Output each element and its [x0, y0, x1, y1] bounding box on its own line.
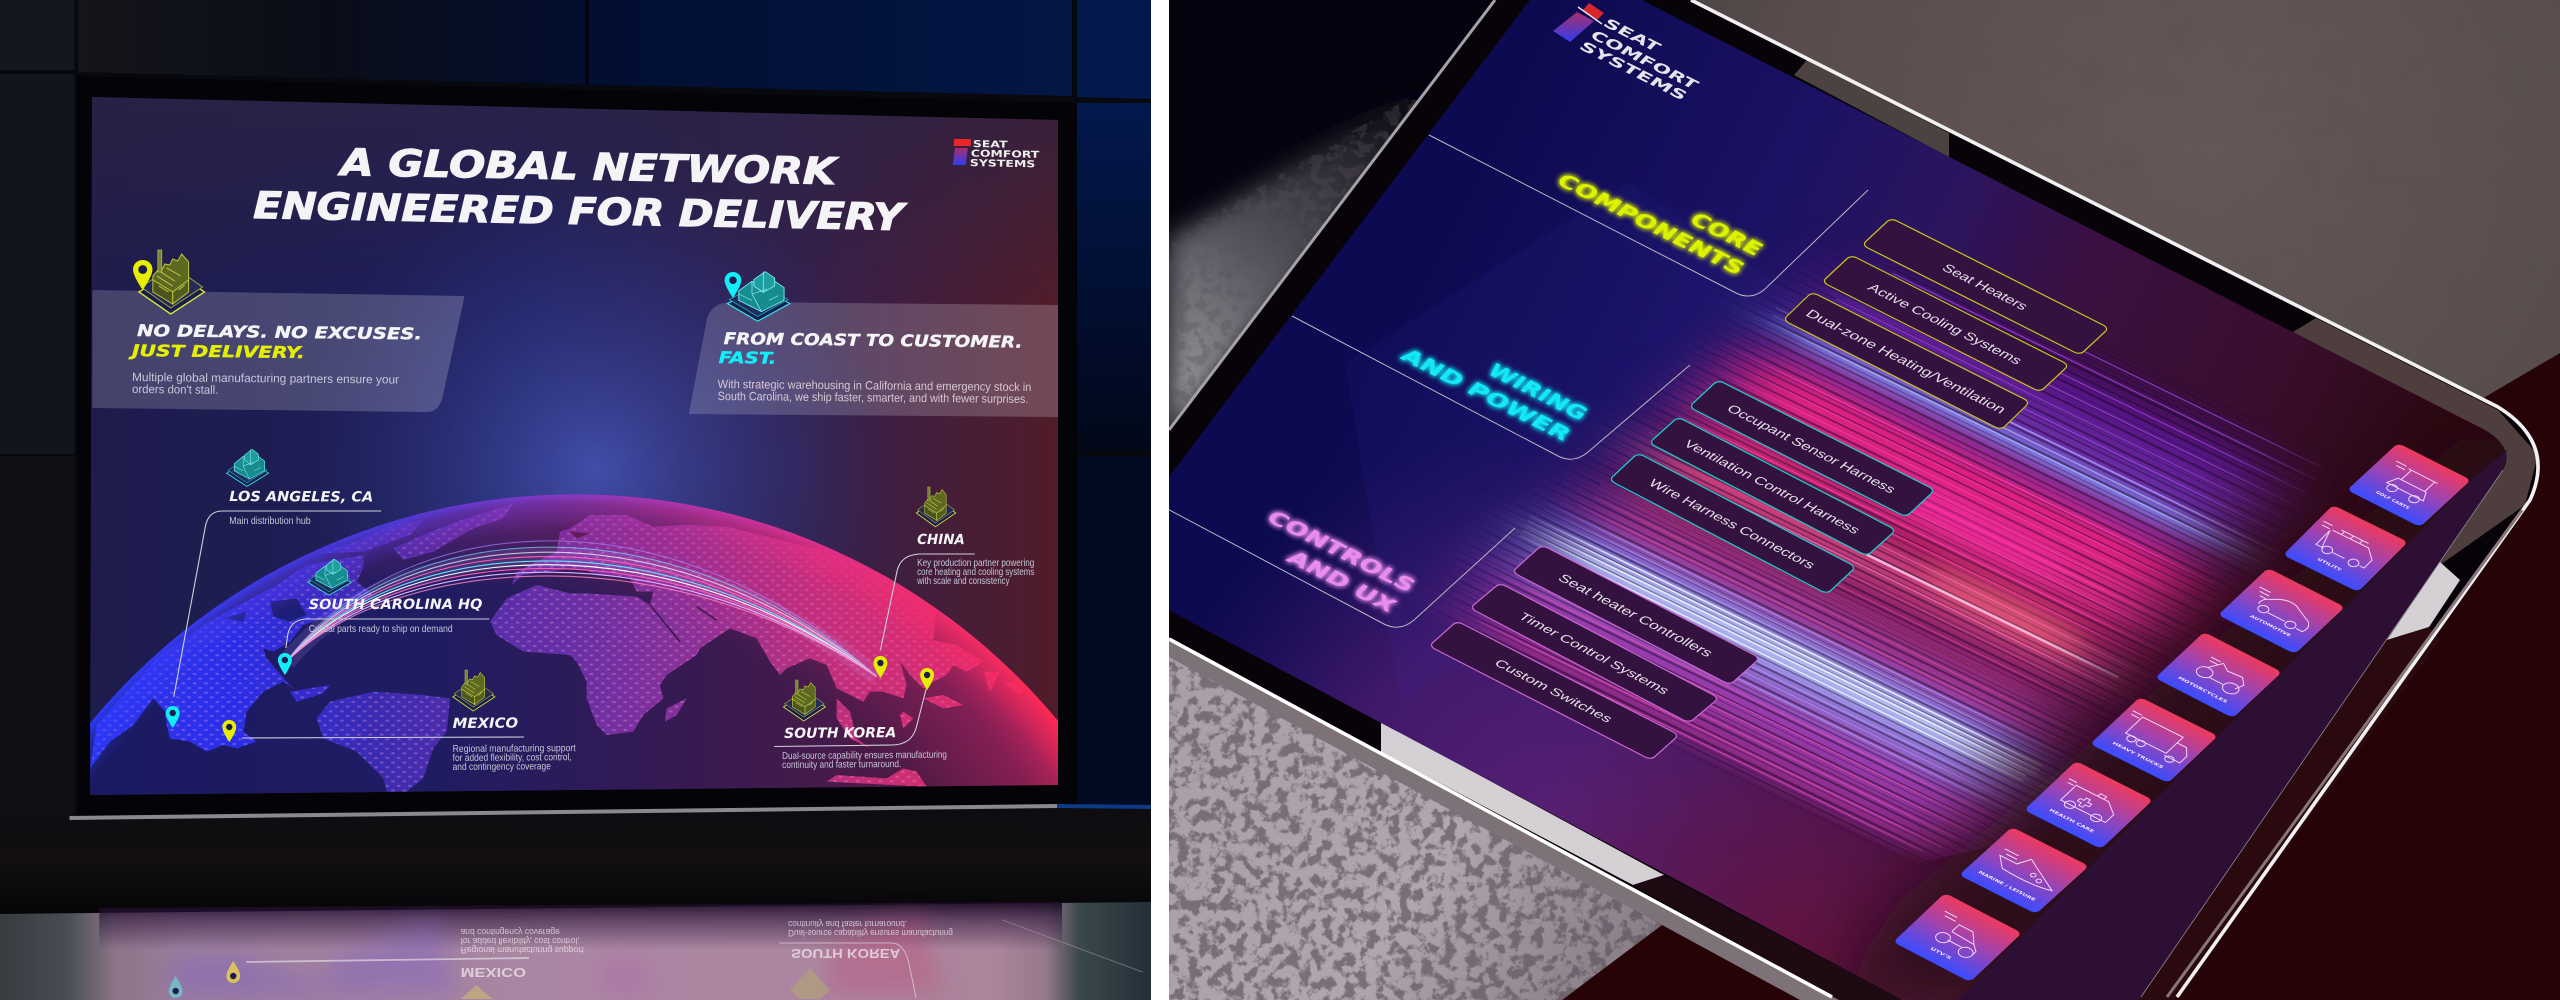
tile: utility	[2283, 505, 2408, 592]
poster logo	[953, 139, 1040, 170]
button: wire harness connectors: Wire Harness Connectors	[1645, 477, 1818, 572]
card body: South Carolina, we ship faster, smarter, and with fewer surprises.	[718, 389, 1028, 406]
heading: core components: COMPONENTS	[1552, 170, 1750, 279]
heading: wiring and power: WIRING	[1483, 360, 1593, 424]
floor reflection of poster	[169, 919, 953, 999]
button: active cooling systems: Active Cooling Systems	[1864, 282, 2025, 367]
location: south korea: continuity and faster turnaround.	[782, 759, 901, 771]
location: south carolina hq	[278, 559, 489, 675]
card: coast to customer	[689, 272, 1058, 417]
card body: With strategic warehousing in California and emergency stock in	[718, 377, 1031, 394]
location: south carolina hq: Critical parts ready to ship on demand	[309, 624, 453, 635]
stage plinth	[0, 804, 1153, 914]
title: ENGINEERED FOR DELIVERY	[253, 184, 908, 239]
card heading: FAST.	[719, 348, 776, 368]
button: seat heater controllers	[1512, 545, 1760, 685]
card body: orders don't stall.	[132, 382, 218, 397]
location: mexico: Regional manufacturing support	[453, 743, 576, 755]
location: china: core heating and cooling systems	[917, 567, 1034, 578]
button: timer control systems: Timer Control Systems	[1515, 611, 1672, 697]
tile: automotive: AUTOMOTIVE	[2248, 614, 2292, 638]
dark wall backdrop	[0, 0, 1153, 1000]
tile: marine / leisure	[1959, 827, 2089, 914]
button: occupant sensor harness	[1689, 380, 1935, 517]
location: south carolina hq: SOUTH CAROLINA HQ	[309, 597, 483, 613]
card heading	[719, 329, 1023, 368]
globe ocean	[90, 494, 1058, 795]
location: los angeles: Main distribution hub	[229, 516, 311, 527]
heading: wiring and power: AND POWER	[1396, 345, 1576, 445]
location: south korea: SOUTH KOREA	[784, 725, 896, 742]
button: seat heater controllers: Seat heater Controllers	[1554, 572, 1715, 660]
button: ventilation control harness: Ventilation Control Harness	[1680, 438, 1863, 537]
tablet logo: SYSTEMS	[1575, 39, 1690, 104]
location: mexico: MEXICO	[453, 715, 518, 732]
button: timer control systems	[1470, 583, 1719, 723]
icon: warehouse with cyan pin	[725, 272, 790, 321]
location: china	[873, 487, 1034, 678]
button: occupant sensor harness: Occupant Sensor Harness	[1723, 403, 1899, 496]
white gutter between photos	[1151, 0, 1169, 1000]
tile: heavy trucks: HEAVY TRUCKS	[2111, 741, 2165, 770]
location: los angeles: LOS ANGELES, CA	[229, 489, 373, 506]
icon: factory with yellow pin	[133, 250, 204, 314]
button: custom switches	[1429, 621, 1679, 760]
card body	[132, 370, 399, 397]
heading: controls and ux	[1262, 507, 1421, 616]
poster logo: COMFORT	[971, 148, 1040, 161]
button: wire harness connectors	[1609, 453, 1856, 594]
location: south korea: Dual-source capability ensures manufacturing	[782, 750, 947, 762]
globe right-side crescent	[222, 494, 1058, 786]
poster text and icons layer	[92, 139, 1058, 773]
tablet logo	[1553, 3, 1702, 104]
card: no delays	[92, 250, 465, 412]
title: A GLOBAL NETWORK	[337, 141, 839, 193]
location: mexico: for added flexibility, cost control,	[453, 752, 572, 764]
tile: motorcycles: MOTORCYCLES	[2176, 676, 2229, 705]
location: south korea	[774, 668, 947, 771]
poster logo: SEAT	[973, 139, 1008, 151]
tile: health care	[2024, 761, 2153, 849]
card heading: FROM COAST TO CUSTOMER.	[724, 329, 1023, 352]
card heading: NO DELAYS. NO EXCUSES.	[137, 321, 422, 343]
floor reflection of poster: SOUTH KOREA	[791, 946, 900, 961]
heading: controls and ux: CONTROLS	[1262, 507, 1421, 596]
button: seat heaters	[1862, 218, 2109, 355]
location: china: Key production partner powering	[917, 558, 1034, 569]
location: mexico: and contingency coverage	[453, 761, 551, 773]
heading: core components: CORE	[1685, 209, 1768, 260]
tile: marine / leisure: MARINE / LEISURE	[1977, 870, 2037, 902]
button: active cooling systems	[1822, 255, 2069, 392]
location: mexico	[222, 670, 576, 773]
button: dual-zone heating/ventilation	[1783, 292, 2030, 430]
tablet logo: COMFORT	[1586, 28, 1702, 93]
card heading: JUST DELIVERY.	[128, 341, 305, 362]
section line: controls and ux	[1160, 505, 1515, 627]
heading: controls and ux: AND UX	[1282, 547, 1401, 616]
tile: golf carts: GOLF CARTS	[2374, 490, 2411, 511]
tile: heavy trucks	[2090, 697, 2218, 783]
poster logo: SYSTEMS	[970, 158, 1036, 170]
photo: left panel wall, plinth and floor	[0, 0, 1153, 1000]
title	[253, 141, 908, 239]
floor reflection of poster: continuity and faster turnaround.	[788, 919, 907, 929]
button: ventilation control harness	[1649, 417, 1896, 556]
tile: automotive	[2218, 568, 2345, 654]
tablet rim highlights	[1169, 0, 2538, 1000]
card body: Multiple global manufacturing partners ensure your	[132, 370, 399, 387]
tile: utvs: UTV'S	[1929, 946, 1953, 961]
floor reflection of poster: and contingency coverage	[461, 927, 560, 937]
button: custom switches: Custom Switches	[1491, 657, 1615, 725]
reflective floor	[0, 902, 1153, 1000]
globe thin glowing rim	[90, 494, 1058, 780]
network arcs	[287, 541, 877, 677]
light streak graphic	[1434, 238, 2322, 862]
location: china: CHINA	[917, 532, 965, 548]
floor reflection of poster: Regional manufacturing support	[461, 945, 584, 955]
tile: utility: UTILITY	[2316, 557, 2343, 573]
icon strip: purple right edge	[1958, 450, 2507, 1000]
floor reflection of poster: Dual-source capability ensures manufacturing	[788, 928, 953, 938]
location: los angeles	[166, 449, 381, 728]
tile: health care: HEALTH CARE	[2048, 808, 2095, 834]
button: dual-zone heating/ventilation: Dual-zone Heating/Ventilation	[1802, 307, 2009, 417]
floor reflection of poster: MEXICO	[461, 965, 526, 980]
photo: concrete tabletop background	[1169, 0, 2560, 1000]
heading: wiring and power	[1396, 345, 1593, 445]
section line: core components	[1429, 135, 1868, 296]
tile: utvs	[1893, 893, 2022, 982]
globe continents	[90, 503, 1030, 792]
tile: golf carts	[2347, 443, 2471, 527]
button: seat heaters: Seat Heaters	[1938, 262, 2031, 313]
heading: core components	[1552, 170, 1768, 279]
card heading	[128, 321, 422, 362]
poster screen with globe	[90, 97, 1058, 795]
tile: motorcycles	[2155, 632, 2282, 718]
tablet logo: SEAT	[1599, 16, 1664, 55]
location: china: with scale and consistency	[916, 576, 1009, 587]
floor reflection of poster: for added flexibility, cost control,	[461, 936, 580, 946]
section line: wiring and power	[1292, 316, 1690, 459]
tablet screen	[1097, 0, 2560, 1000]
card body	[718, 377, 1031, 406]
tablet body and bezel	[1169, 0, 2540, 1000]
